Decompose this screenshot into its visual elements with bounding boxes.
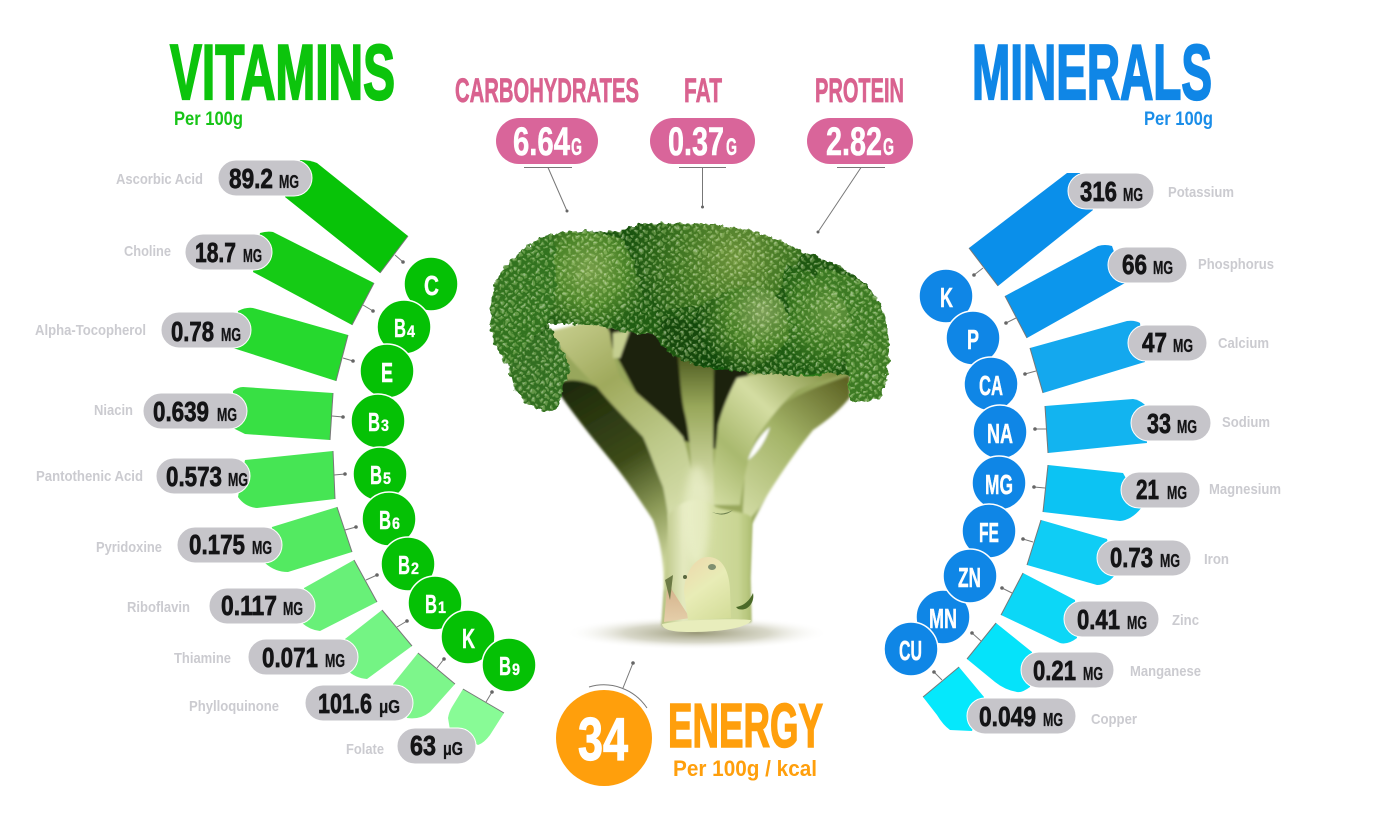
circle: sodium NA: NA xyxy=(987,418,1013,449)
mineral row: zinc: 0.41 xyxy=(1077,604,1120,635)
circle: vitamin C: C xyxy=(424,270,439,301)
circle: vitamin B6 xyxy=(362,492,416,546)
stalk trunk xyxy=(662,465,753,632)
vitamin row: pyridoxine: 0.175 xyxy=(189,529,245,560)
circle: iron FE: FE xyxy=(979,517,999,548)
circle: phosphorus P xyxy=(946,311,1000,365)
mineral row: iron: 0.73 xyxy=(1110,542,1153,573)
vitamin row: alpha-tocopherol: Alpha-Tocopherol xyxy=(35,322,146,339)
vitamin row: phylloquinone xyxy=(189,653,455,721)
mineral row: calcium: Calcium xyxy=(1218,335,1269,352)
ground shadow xyxy=(565,616,829,650)
vitamin row: niacin: 0.639 xyxy=(153,396,209,427)
mineral row: copper: 0.049 xyxy=(979,701,1036,732)
macro: protein xyxy=(807,72,913,234)
vitamin row: thiamine: MG xyxy=(325,651,345,671)
vitamin row: niacin: Niacin xyxy=(94,402,133,419)
macro: fat: 0.37 xyxy=(668,120,724,164)
circle: vitamin B5: 5 xyxy=(383,469,391,488)
vitamin row: ascorbic acid: 89.2 xyxy=(229,163,273,194)
circle: magnesium MG: MG xyxy=(985,469,1013,500)
vitamin row: ascorbic acid xyxy=(116,160,408,273)
mineral row: phosphorus: Phosphorus xyxy=(1198,256,1274,273)
vitamin row: folate xyxy=(346,689,504,764)
macro: fat: G xyxy=(726,134,737,161)
circle: vitamin K: K xyxy=(462,623,475,654)
mineral row: potassium: 316 xyxy=(1080,176,1117,207)
circle: vitamin B4: B xyxy=(394,313,406,343)
vitamin row: choline: 18.7 xyxy=(195,237,236,268)
title: minerals: MINERALS xyxy=(972,28,1212,116)
vitamin row: pyridoxine: Pyridoxine xyxy=(96,539,162,556)
circle: vitamin B6: 6 xyxy=(392,514,400,533)
mineral row: iron xyxy=(1021,520,1229,585)
circle: potassium K: K xyxy=(940,282,953,313)
macro: fat xyxy=(650,72,755,208)
vitamin row: thiamine: 0.071 xyxy=(262,642,318,673)
vitamin row: alpha-tocopherol: MG xyxy=(221,325,241,345)
vitamin row: pyridoxine: MG xyxy=(252,538,272,558)
vitamin row: alpha-tocopherol xyxy=(35,308,355,381)
circle: vitamin B3: B xyxy=(368,407,380,437)
circle: vitamin B2 xyxy=(381,537,435,591)
title: vitamins xyxy=(170,28,395,130)
vitamin row: phylloquinone: 101.6 xyxy=(318,688,372,719)
title: minerals xyxy=(972,28,1213,130)
circle: vitamin B3 xyxy=(351,394,405,448)
circle: vitamin B4: 4 xyxy=(407,322,415,341)
vitamin row: pantothenic acid: Pantothenic Acid xyxy=(36,468,143,485)
mineral row: magnesium xyxy=(1032,465,1281,521)
mineral row: sodium: Sodium xyxy=(1222,414,1270,431)
circle: manganese MN: MN xyxy=(929,603,957,634)
circle: zinc ZN xyxy=(943,549,997,603)
circle: vitamin B2: B xyxy=(398,550,410,580)
title: minerals: Per 100g xyxy=(1144,109,1213,130)
broccoli illustration xyxy=(491,223,889,650)
mineral row: phosphorus: 66 xyxy=(1122,249,1147,280)
energy circle xyxy=(556,690,652,786)
mineral row: sodium: MG xyxy=(1177,417,1197,437)
circle: calcium CA xyxy=(964,357,1018,411)
vitamin circles xyxy=(351,257,536,692)
mineral row: copper: MG xyxy=(1043,710,1063,730)
macro: protein: 2.82 xyxy=(826,120,882,164)
circle: vitamin B9 xyxy=(482,638,536,692)
macro: carbohydrates: 6.64 xyxy=(513,120,571,164)
energy callout xyxy=(556,663,823,786)
vitamin row: folate: μG xyxy=(443,739,463,759)
mineral row: zinc: MG xyxy=(1127,613,1147,633)
macro: protein: PROTEIN xyxy=(815,72,904,110)
circle: vitamin B4 xyxy=(377,300,431,354)
vitamin row: choline: MG xyxy=(243,246,262,266)
circle: vitamin B2: 2 xyxy=(411,559,419,578)
circle: vitamin E: E xyxy=(381,357,393,388)
vitamin row: folate: 63 xyxy=(410,730,436,761)
circle: vitamin B1: B xyxy=(425,589,437,619)
stalk branches xyxy=(547,318,850,626)
vitamin row: niacin xyxy=(94,387,345,440)
circle: potassium K xyxy=(919,269,973,323)
title: vitamins: VITAMINS xyxy=(170,28,395,116)
mineral row: copper: Copper xyxy=(1091,711,1137,728)
energy value: 34 xyxy=(578,706,628,773)
circle: vitamin C xyxy=(404,257,458,311)
vitamin row: niacin: MG xyxy=(217,405,237,425)
mineral row: sodium xyxy=(1033,399,1270,453)
mineral row: manganese: MG xyxy=(1083,664,1103,684)
mineral row: manganese: Manganese xyxy=(1130,663,1201,680)
mineral row: calcium xyxy=(1023,321,1269,393)
energy leader dot xyxy=(631,661,635,665)
circle: phosphorus P: P xyxy=(967,324,979,355)
circle: vitamin B9: 9 xyxy=(512,660,520,679)
mineral row: calcium: 47 xyxy=(1142,327,1167,358)
vitamin row: thiamine xyxy=(174,610,412,679)
vitamin row: riboflavin: Riboflavin xyxy=(127,599,190,616)
vitamin row: riboflavin: MG xyxy=(283,599,303,619)
circle: iron FE xyxy=(962,504,1016,558)
mineral row: zinc: Zinc xyxy=(1172,612,1199,629)
circle: magnesium MG xyxy=(972,456,1026,510)
vitamin row: pyridoxine xyxy=(96,507,358,572)
circle: vitamin B9: B xyxy=(499,651,511,681)
vitamin row: choline xyxy=(124,232,375,325)
macro: carbohydrates: G xyxy=(571,134,582,161)
mineral row: zinc xyxy=(1000,573,1199,643)
circle: copper CU: CU xyxy=(899,635,922,666)
mineral row: copper xyxy=(923,667,1137,734)
vitamin row: phylloquinone: Phylloquinone xyxy=(189,698,279,715)
vitamin row: folate: Folate xyxy=(346,741,384,758)
circle: calcium CA: CA xyxy=(979,370,1003,401)
mineral circles xyxy=(884,269,1027,676)
circle: vitamin K xyxy=(441,610,495,664)
macro: protein: G xyxy=(883,134,894,161)
mineral row: iron: Iron xyxy=(1204,551,1229,568)
energy leader arc xyxy=(589,663,647,708)
mineral row: phosphorus xyxy=(1004,245,1274,338)
circle: vitamin B6: B xyxy=(379,505,391,535)
mineral row: potassium: Potassium xyxy=(1168,184,1234,201)
macro: carbohydrates xyxy=(455,72,639,212)
vitamin row: phylloquinone: μG xyxy=(379,697,400,717)
circle: vitamin B5: B xyxy=(370,460,382,490)
mineral row: potassium: MG xyxy=(1123,185,1143,205)
mineral row: phosphorus: MG xyxy=(1153,258,1173,278)
vitamin row: alpha-tocopherol: 0.78 xyxy=(171,316,214,347)
circle: manganese MN xyxy=(916,590,970,644)
vitamin row: ascorbic acid: Ascorbic Acid xyxy=(116,171,203,188)
mineral row: calcium: MG xyxy=(1173,336,1193,356)
broccoli crown xyxy=(491,223,889,411)
macro: carbohydrates: CARBOHYDRATES xyxy=(455,72,639,110)
vitamin row: ascorbic acid: MG xyxy=(279,172,299,192)
vitamin row: thiamine: Thiamine xyxy=(174,650,231,667)
mineral row: iron: MG xyxy=(1160,551,1180,571)
energy unit: Per 100g / kcal xyxy=(673,756,817,781)
circle: copper CU xyxy=(884,622,938,676)
vitamin row: choline: Choline xyxy=(124,243,171,260)
mineral row: magnesium: MG xyxy=(1167,483,1187,503)
mineral row: manganese xyxy=(967,623,1201,692)
circle: vitamin B1 xyxy=(408,576,462,630)
circle: zinc ZN: ZN xyxy=(958,562,981,593)
title: vitamins: Per 100g xyxy=(174,109,243,130)
vitamin row: pantothenic acid: 0.573 xyxy=(166,461,222,492)
mineral row: magnesium: Magnesium xyxy=(1209,481,1281,498)
circle: vitamin E xyxy=(360,344,414,398)
vitamin row: riboflavin xyxy=(127,560,379,631)
mineral row: magnesium: 21 xyxy=(1136,474,1159,505)
mineral row: potassium xyxy=(969,173,1234,286)
circle: vitamin B1: 1 xyxy=(438,598,446,617)
energy heading: ENERGY xyxy=(668,692,823,761)
macro: fat: FAT xyxy=(684,72,722,110)
mineral row: manganese: 0.21 xyxy=(1033,655,1076,686)
circle: sodium NA xyxy=(973,405,1027,459)
circle: vitamin B5 xyxy=(353,447,407,501)
vitamin row: riboflavin: 0.117 xyxy=(221,590,277,621)
vitamin row: pantothenic acid: MG xyxy=(228,470,248,490)
mineral row: sodium: 33 xyxy=(1147,408,1171,439)
vitamin row: pantothenic acid xyxy=(36,451,347,508)
circle: vitamin B3: 3 xyxy=(381,416,389,435)
